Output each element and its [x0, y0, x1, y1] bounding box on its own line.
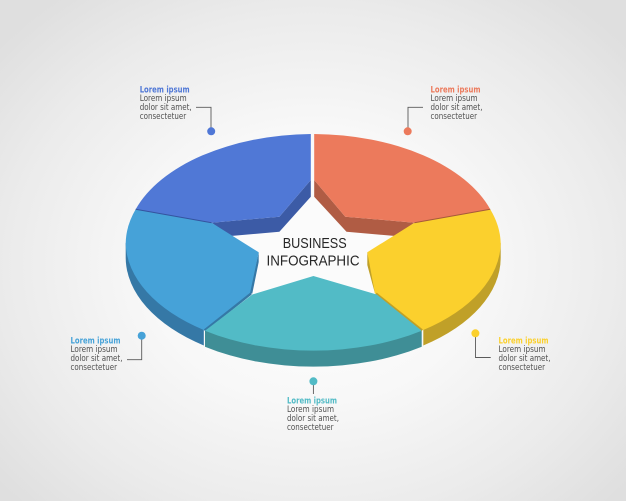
callout: teal: Lorem ipsum — [287, 405, 334, 415]
segment: light blue — [126, 209, 259, 346]
callout: orange: consectetuer — [430, 112, 477, 122]
callout: blue: Lorem ipsum — [140, 86, 190, 96]
callout: teal: Lorem ipsum — [287, 396, 337, 406]
callout: yellow: consectetuer — [498, 363, 545, 373]
center label: BUSINESS — [283, 235, 347, 252]
callout: teal — [287, 377, 339, 433]
segment: yellow — [367, 209, 501, 346]
callout: orange: Lorem ipsum — [430, 94, 478, 104]
segment: orange — [314, 134, 490, 236]
callout: teal: consectetuer — [287, 423, 334, 433]
callout: light blue: Lorem ipsum — [70, 336, 120, 346]
callout: light blue — [70, 332, 146, 373]
callout: blue — [140, 86, 215, 135]
center label — [266, 235, 360, 270]
center star — [231, 194, 395, 294]
callout: teal: dolor sit amet, — [287, 414, 339, 424]
callout: light blue: dolor sit amet, — [70, 354, 122, 364]
segment: teal — [204, 276, 422, 367]
callout: light blue: consectetuer — [70, 363, 117, 373]
callout: blue: Lorem ipsum — [140, 94, 187, 104]
callout: orange: dolor sit amet, — [430, 103, 482, 113]
callout: yellow: dolor sit amet, — [498, 354, 550, 364]
callout: blue: dolor sit amet, — [140, 103, 192, 113]
segment: blue — [136, 134, 311, 236]
callout: orange: Lorem ipsum — [430, 86, 480, 96]
callout: yellow: Lorem ipsum — [498, 336, 548, 346]
callout: blue: consectetuer — [140, 112, 187, 122]
callout: yellow: Lorem ipsum — [498, 345, 546, 355]
callout: yellow — [471, 329, 550, 373]
center label: INFOGRAPHIC — [266, 253, 360, 270]
callout: orange — [404, 86, 482, 135]
callout: light blue: Lorem ipsum — [70, 345, 118, 355]
